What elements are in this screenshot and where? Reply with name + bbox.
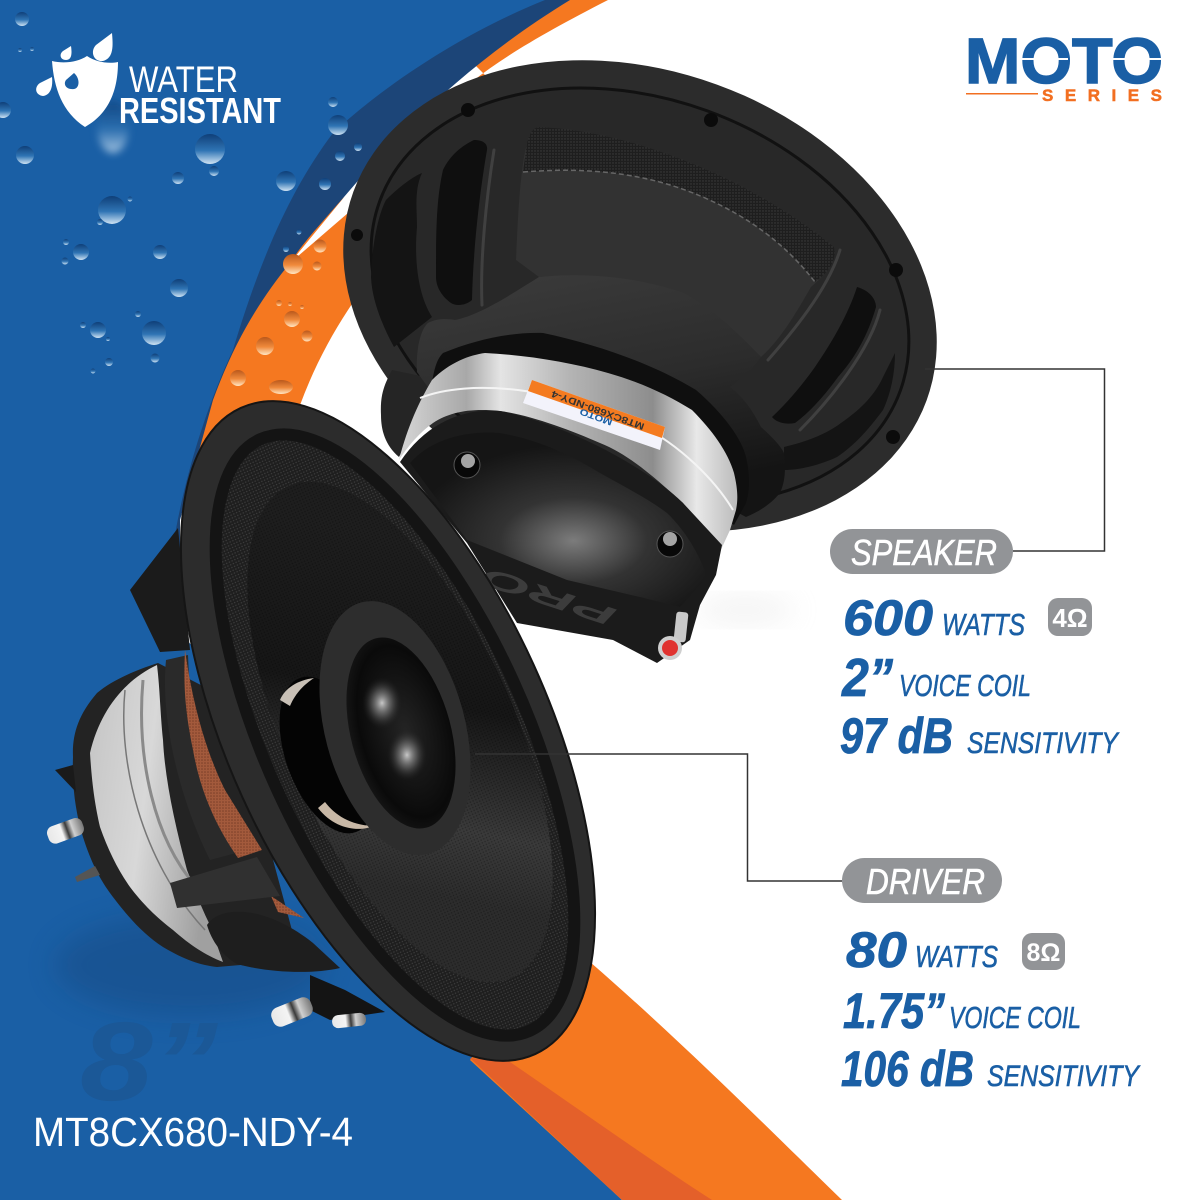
logo: moto series: MOTO — [965, 25, 1163, 97]
basket dark frame — [165, 655, 240, 860]
voice coil: VOICE COIL — [899, 668, 1031, 703]
600 watts — [843, 590, 1025, 646]
icon: water resistant shield — [36, 33, 118, 127]
horizontal arm — [170, 857, 280, 908]
leader line: driver — [475, 754, 842, 881]
leader line: speaker — [925, 369, 1104, 551]
80 watts — [846, 922, 998, 978]
embossed brand: PRO — [477, 561, 620, 633]
cone texture — [184, 439, 616, 1025]
basket arm highlights — [482, 150, 880, 430]
panel: driver specs — [841, 858, 1141, 1097]
basket hub — [417, 275, 785, 517]
cap highlights — [362, 677, 427, 781]
sensitivity: SENSITIVITY — [987, 1060, 1141, 1093]
chrome terminal left — [45, 816, 86, 846]
cone seam — [523, 170, 815, 282]
navy swoosh — [160, 0, 570, 600]
water droplets — [0, 12, 362, 394]
foam surround — [142, 385, 648, 1085]
600 watts: 600 — [843, 590, 933, 646]
voice coil: VOICE COIL — [949, 1000, 1081, 1035]
speaker pill: SPEAKER — [851, 532, 997, 573]
600 watts: WATTS — [942, 607, 1025, 642]
rear shell — [73, 663, 300, 967]
dust cap dome — [327, 625, 475, 841]
model label: MOTO — [578, 406, 614, 428]
orange swoosh top — [170, 0, 608, 620]
sensitivity — [841, 1041, 1141, 1097]
dust cap flange — [294, 584, 496, 872]
copper spider — [184, 650, 262, 858]
driver front view — [95, 342, 681, 1120]
voice coil gap — [260, 664, 396, 846]
sensitivity: SENSITIVITY — [967, 727, 1120, 760]
back plate dome — [410, 432, 707, 607]
chrome magnet ring — [399, 353, 737, 567]
cone window main — [516, 127, 835, 357]
dark orange strip — [470, 1058, 712, 1200]
rear terminal tabs — [55, 765, 100, 882]
impedance badge 8 ohm — [1022, 933, 1065, 970]
blue field — [0, 0, 622, 1200]
shadow below speaker — [695, 598, 795, 622]
heading: water resistant: RESISTANT — [119, 90, 281, 131]
driver pill: DRIVER — [866, 861, 985, 902]
terminal block bottom — [269, 975, 385, 1029]
size watermark: 8” — [80, 999, 218, 1124]
cone — [184, 439, 616, 1025]
basket frame — [312, 16, 968, 576]
outer rim — [276, 0, 1004, 612]
model label: MT8CX680-NDY-4 — [549, 387, 646, 432]
logo: moto series: SERIES — [1042, 86, 1162, 105]
red terminal — [658, 611, 689, 660]
heading: water resistant: WATER — [129, 59, 238, 100]
driver rear basket and magnet — [45, 528, 385, 1029]
sensitivity — [840, 708, 1120, 764]
model number: MT8CX680-NDY-4 — [33, 1109, 353, 1155]
model label — [523, 380, 665, 450]
cone window far right — [784, 353, 895, 470]
chrome magnet — [90, 665, 223, 962]
voice coil — [843, 983, 1081, 1039]
black ring behind chrome — [432, 333, 749, 525]
heading: water resistant — [119, 59, 281, 131]
sensitivity: 97 dB — [840, 708, 953, 764]
cone window narrow right — [772, 287, 876, 424]
80 watts: 80 — [846, 922, 907, 978]
panel: speaker specs — [830, 529, 1120, 764]
product shadow on blue — [55, 915, 325, 1015]
mounting screws — [454, 452, 683, 557]
white sliver — [290, 105, 440, 263]
bracket — [400, 411, 722, 663]
impedance badge 8 ohm: 8Ω — [1027, 939, 1060, 967]
coil crescent top — [280, 678, 314, 706]
outer rim — [95, 342, 681, 1120]
sensitivity: 106 dB — [841, 1041, 974, 1097]
speaker rear view — [276, 0, 1004, 663]
cone mesh upper part — [523, 127, 835, 282]
cone window far left — [371, 173, 432, 347]
rim screws — [351, 103, 903, 444]
voice coil: 2” — [841, 648, 893, 708]
upper bracket arm — [130, 528, 190, 652]
voice coil: 1.75” — [843, 983, 945, 1039]
impedance badge 4 ohm — [1048, 598, 1092, 636]
voice coil — [841, 648, 1031, 708]
cone window narrow left — [436, 140, 487, 305]
lower left lobe — [381, 370, 440, 457]
lower arm — [207, 912, 340, 972]
orange swoosh bottom — [470, 930, 842, 1200]
coil crescent bottom — [318, 802, 373, 829]
80 watts: WATTS — [915, 939, 998, 974]
impedance badge 4 ohm: 4Ω — [1052, 603, 1088, 633]
